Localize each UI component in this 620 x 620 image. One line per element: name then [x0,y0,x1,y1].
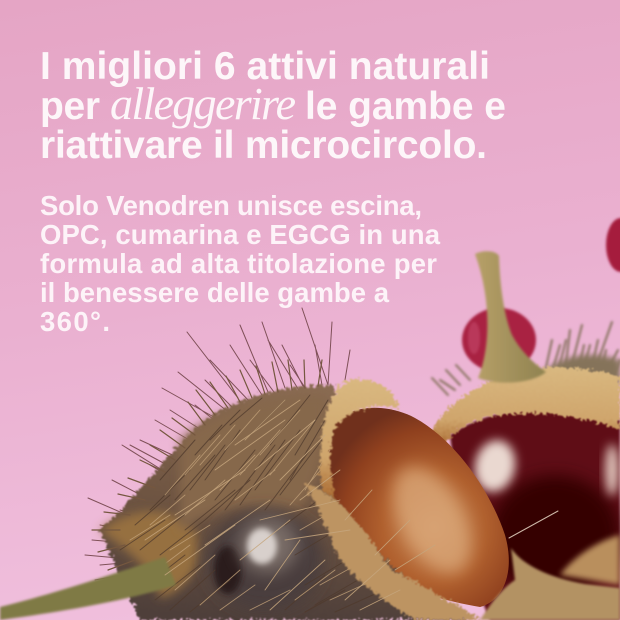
red berry behind stem [462,308,536,372]
title: le gambe e [305,85,506,128]
dense fur dark [120,395,395,612]
left olive stem [0,557,176,620]
tan ridge [305,482,482,620]
dark nut interior [450,409,620,620]
upper brown fur [180,395,326,530]
husk rim [429,367,620,448]
back spikes [432,322,620,395]
title: alleggerire [110,78,296,129]
title [40,45,506,167]
photo: chestnuts [0,218,620,620]
body text: il benessere delle gambe a [40,277,390,308]
body text [40,190,441,337]
thin hair across nut [509,511,558,538]
short silhouette hairs [92,360,322,570]
body text: formula ad alta titolazione per [40,248,437,279]
inner hairs light [145,400,435,610]
main chestnut nut [322,408,509,607]
grey cloud around highlight [238,517,298,573]
spike base [540,355,620,385]
husk warm left tuft [100,511,198,598]
title: riattivare il microcircolo. [40,124,487,167]
back chestnut husk [429,251,620,620]
white highlight [247,528,277,564]
white highlights [470,436,520,496]
lower right fuzzy rim [560,535,620,585]
lower right husk and stem [480,548,620,620]
dark shadow [214,546,242,594]
deep shadow [490,475,620,595]
long outer spikes [85,308,350,600]
body text: Solo Venodren unisce escina, [40,190,422,221]
front husk body [100,385,470,620]
husk rim over nut [320,379,398,500]
body text: OPC, cumarina e EGCG in una [40,219,441,250]
body text: 360°. [40,306,110,337]
title: I migliori 6 attivi naturali [40,45,490,88]
red berry far right [606,218,620,272]
grey centre of husk [207,510,323,610]
title: per [40,85,100,128]
nut sheen [385,459,478,580]
blurred stem [475,251,546,383]
dense fur light [130,400,385,610]
